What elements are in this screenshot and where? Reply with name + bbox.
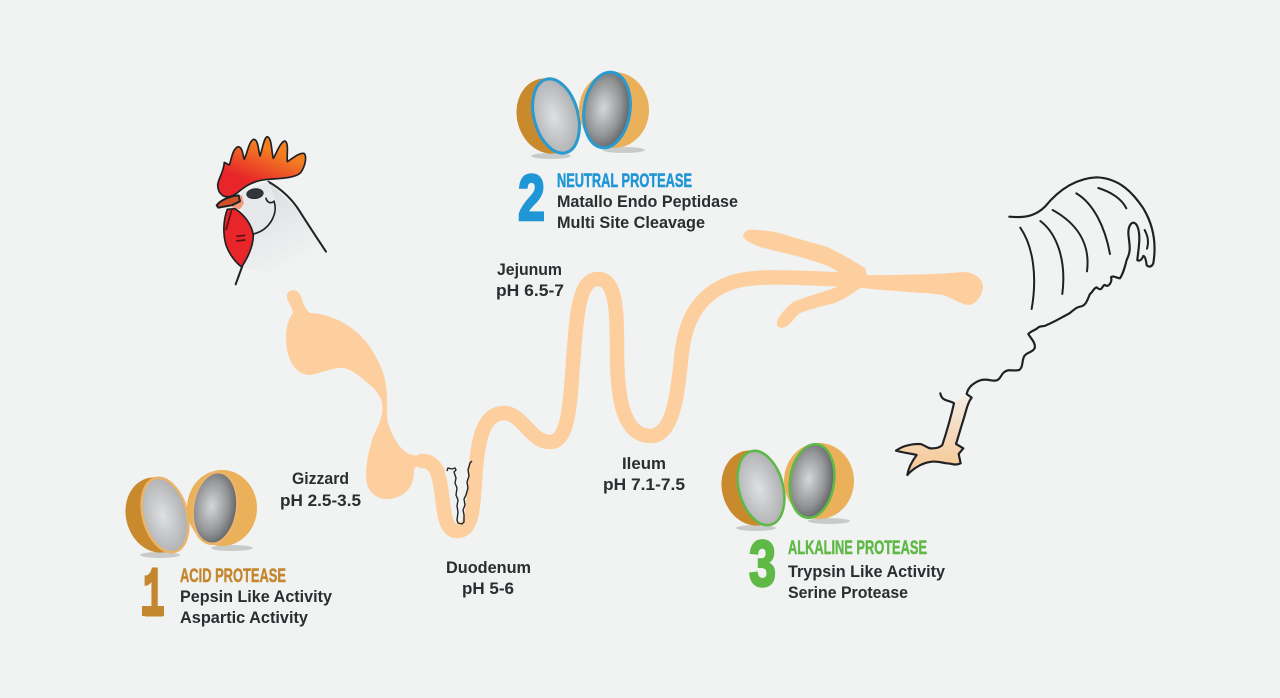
icon: rooster head [217,137,326,284]
protease 1 label [142,558,333,637]
rooster wattle marks [226,210,245,241]
label: gizzard: pH 2.5-3.5 [280,492,361,510]
left half sphere [508,71,588,161]
rooster neck outline [268,182,326,252]
digestive tract [286,230,983,531]
rooster comb [218,137,306,197]
duodenum villi outline [447,461,472,524]
number 3: 3 [749,527,776,600]
number 2: 2 [518,161,545,234]
tail feather lines [1020,188,1148,309]
right half sphere [579,69,649,153]
intestine tube [422,277,860,531]
heading: neutral protease: NEUTRAL PROTEASE [557,170,692,192]
rooster wattle [224,209,253,267]
aspartic text: Aspartic Activity [180,609,309,627]
heading: acid protease: ACID PROTEASE [180,565,286,587]
right half sphere [187,469,257,551]
label: duodenum [446,559,531,598]
label: duodenum: pH 5-6 [462,580,514,598]
label: jejunum [496,261,564,300]
rooster face [242,182,276,234]
serine text: Serine Protease [788,584,908,602]
label: jejunum: pH 6.5-7 [496,282,564,300]
arrow barbs and end of tract [743,230,983,328]
leg fill [896,397,972,475]
right half sphere [784,441,854,524]
multi site text: Multi Site Cleavage [557,214,705,232]
rooster neck [243,182,326,277]
heading: alkaline protease: ALKALINE PROTEASE [788,537,927,559]
protease 2 icon: neutral half spheres [508,69,649,161]
rooster eye [246,188,264,200]
label: ileum [603,455,685,494]
trypsin text: Trypsin Like Activity [788,563,946,581]
pepsin text: Pepsin Like Activity [180,588,333,606]
label: ileum: Ileum [622,455,666,473]
left half sphere [117,470,197,560]
rooster beak [217,195,240,208]
label: jejunum: Jejunum [497,261,562,279]
label: gizzard: Gizzard [292,470,349,488]
rooster cheek [232,195,244,209]
number 1 [142,558,164,637]
label: ileum: pH 7.1-7.5 [603,476,685,494]
label: gizzard [280,470,361,510]
matallo text: Matallo Endo Peptidase [557,193,738,211]
body and leg outline [896,177,1155,475]
left half sphere [713,443,793,533]
crop and gizzard [286,290,445,499]
label: duodenum: Duodenum [446,559,531,577]
protease 3 label [749,527,946,602]
protease 1 icon: acid half spheres [117,469,257,560]
protease 1 label: 1 [143,558,164,637]
protease 2 label [518,161,738,234]
rooster throat line [253,198,275,234]
rooster neck front line [236,266,242,284]
protease 3 icon: alkaline half spheres [713,441,854,533]
icon: rooster body and leg [896,177,1155,475]
